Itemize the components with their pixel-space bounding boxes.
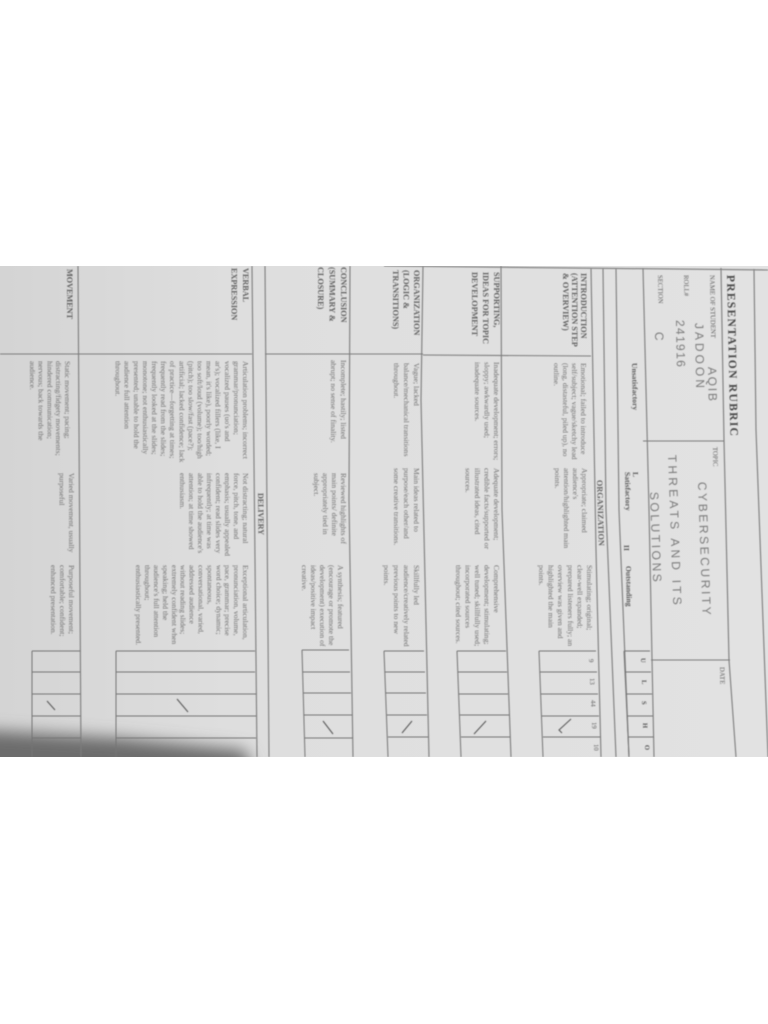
topic field [647,447,718,615]
row: conclusion: Reviewed highlights of [339,473,348,544]
row: organization: previous points to new [392,565,401,634]
row: conclusion: (encourage or promote the [327,565,336,646]
row: conclusion: ideas/positive impact [309,565,318,630]
row: introduction: (ATTENTION STEP [570,273,579,347]
rating letters: U [639,658,646,663]
row: verbal expression: conversational, varied, [196,565,206,634]
row: organization: Skillfully led [412,565,421,605]
rating letters: H [641,723,648,729]
rating scale header: Unsatisfactory [630,363,640,410]
row: verbal expression: pronunciation, volume, [232,565,241,636]
row: verbal expression: audience's full attention [152,565,161,637]
row: verbal expression: infrequently; at time was [205,473,214,549]
row: verbal expression: confident; read slides very [214,473,223,554]
row: conclusion: main points/ definite [330,473,339,536]
section heading: organization: ORGANIZATION [595,480,606,546]
student info fields: 241916 [673,320,688,367]
row: introduction: highlighted the main [547,565,556,628]
row: verbal expression: Articulation problems; incorrect [241,361,250,460]
class score counts: 10 [592,744,599,751]
row: conclusion: CONCLUSION [339,267,348,323]
row: supporting ideas: Inadequate development; errors; [492,362,501,460]
rating scale header: L [631,472,640,477]
row: verbal expression: without reading slides; [179,565,188,634]
row: conclusion: abrupt; no sense of finality. [329,360,338,443]
rating scale header [623,362,639,607]
student info fields: AQIB [705,367,720,401]
row: movement: Purposeful movement; [67,565,76,634]
row: verbal expression: enthusiastically presented. [134,565,143,645]
row: verbal expression: word choice; dynamic; [214,565,223,635]
row: verbal expression: VERBAL [241,268,250,303]
class score counts: 44 [589,700,596,707]
row: introduction: self/subject; vague/sketchy lead [570,363,579,460]
row: verbal expression: grammar/pronunciation; [232,361,241,435]
class score counts: 9 [587,659,594,663]
row: movement: enhanced presentation. [49,565,58,635]
row: introduction: points. [537,565,546,586]
row: verbal expression: artificial; lacked confidence; lack [177,361,186,463]
row: verbal expression: extremely confident when [170,565,179,644]
row: introduction: & OVERVIEW) [561,273,570,331]
row: supporting ideas: SUPPORTING, [492,272,501,327]
row: organization: throughout. [392,363,401,398]
topic field: CYBERSECURITY [695,482,714,615]
row: verbal expression: pace, grammar; precise [223,565,232,636]
rating scale header: II [622,545,631,551]
row: movement: Varied movement, usually [67,473,76,553]
row: conclusion [300,267,348,647]
row: movement: nervous; back towards the [37,361,46,441]
row: verbal expression: frequently read from the slides; [159,361,168,456]
student info fields: JADOON [692,323,707,388]
rating scale header: Outstanding [624,566,634,607]
score grids [32,650,654,757]
row: organization: (LOGIC & [402,270,410,309]
student info fields [652,275,720,401]
topic field: SOLUTIONS [647,492,664,582]
row: supporting ideas: throughout; cited sources. [454,565,463,644]
row: supporting ideas: Adequate development; [492,468,501,540]
row: verbal expression: EXPRESSION [230,268,238,320]
row: introduction: audience's [571,468,580,499]
row: verbal expression: able to hold the audience's [196,473,205,553]
row: verbal expression: presented; unable to hold the [132,361,141,449]
row: introduction: Appropriate; claimed [580,468,589,533]
row: supporting ideas: incorporated sources [464,565,472,628]
row: verbal expression: throughout. [114,361,123,396]
row: supporting ideas: well tuned; skillfully used; [473,565,482,646]
row: supporting ideas: Comprehensive [492,565,501,613]
rubric form [0,266,768,757]
student info fields: C [652,332,666,341]
row: supporting ideas: inadequate sources. [473,362,482,422]
row: supporting ideas: sources. [464,468,472,493]
row: verbal expression: emphasis; usually appealed [223,473,232,556]
row: organization [382,270,421,647]
row: movement: hindered communication; [45,361,54,439]
row: verbal expression: force, pitch, tone, and [232,473,241,539]
row: movement: distracting/fidgety movements; [54,361,63,456]
rating letters: S [640,701,647,705]
title: PRESENTATION RUBRIC [724,275,739,436]
class score counts: 13 [588,678,595,685]
row: conclusion: A synthesis; featured [336,565,345,629]
row: organization: audience/creatively related [402,565,411,647]
row: organization: ORGANIZATION [412,270,421,335]
row: verbal expression: spontaneous, [205,565,214,605]
rating letters [639,658,650,750]
row: verbal expression: Exceptional articulation, [241,565,250,640]
row: verbal expression: throughout; [143,565,152,600]
row: conclusion: CLOSURE) [316,267,325,310]
row: supporting ideas: illustrated ideas, cited [473,468,482,535]
row: introduction: prepared listeners fully; an [566,565,575,646]
row: verbal expression: frequently looked at the slides; [150,361,159,455]
row: verbal expression: mean, it's like), poorly worded; [205,361,214,456]
row: conclusion: appropriately tied in [321,473,330,535]
row: verbal expression: speaking; held the [161,565,170,621]
row: introduction: clear-well expanded; [575,565,584,628]
class score counts: 19 [590,722,597,729]
row: verbal expression: addressed audience [188,565,197,624]
rating letters: L [640,680,647,685]
row: movement: MOVEMENT [65,269,74,320]
rating scale header: Satisfactory [623,472,633,511]
row: introduction: points. [553,468,562,489]
row: verbal expression: audience full attention [123,361,132,429]
row: introduction [537,273,594,646]
row: conclusion: creative. [300,565,309,591]
row: supporting ideas: IDEAS FOR TOPIC [481,272,490,344]
row: introduction: attention/highlighted main [562,468,571,549]
row: verbal expression: too soft/loud (volume); too/high [196,361,204,459]
row: conclusion: Incomplete; hastily; listed [339,360,348,439]
row: verbal expression: ar's); vocalized fillers (like, I [214,361,223,449]
row: movement: audience. [28,361,37,390]
topic field: TOPIC [711,447,718,467]
row: movement: comfortable; confident; [58,565,67,636]
row: conclusion: (SUMMARY & [328,267,336,322]
row: verbal expression: monotone; not enthusiastically [141,361,150,454]
row: introduction: Stimulating; original; [585,565,594,630]
class score counts [588,658,599,752]
row: introduction: overview was given and [556,565,565,639]
section heading: delivery: DELIVERY [256,493,265,535]
row: conclusion: development) execution of [318,565,327,647]
row: introduction: (long, distasteful, piled up), no [561,363,570,457]
row: introduction: INTRODUCTION [579,273,588,339]
paper photo background [0,266,768,757]
row: verbal expression [114,268,250,645]
row: movement [28,269,76,636]
row: supporting ideas: development; stimulating; [482,565,492,645]
student info fields: NAME OF STUDENT [708,275,716,339]
row: verbal expression: enthusiasm. [178,473,187,509]
row: organization: points. [382,565,391,586]
row: supporting ideas [454,272,501,646]
row: verbal expression: Not distracting; natural [241,473,250,543]
row: introduction: Emotional; failed to introduce [579,363,588,455]
row: supporting ideas: sloppy; awkwardly used; [482,362,492,438]
row: supporting ideas: credible facts/supported or [482,468,492,549]
student info fields: ROLL# [682,275,689,297]
row: conclusion: subject. [312,473,321,497]
student info fields: SECTION [656,275,664,304]
shadow at lower left corner [0,720,260,757]
row: organization: balance/mechanical transitions [402,363,411,456]
row: movement: purposeful [58,473,66,505]
row: organization: some creative transitions. [392,468,401,545]
rating letters: O [643,745,650,750]
topic field: THREATS AND ITS [665,455,684,605]
row: verbal expression: attention; at time showed [187,473,196,550]
row: verbal expression: vocalized pauses (uo's and [223,361,232,442]
row: organization: TRANSITIONS) [391,270,400,329]
date field: DATE [718,667,725,684]
check marks [47,699,571,734]
row: introduction: outline. [552,363,561,386]
row: organization: Vague; lacked [412,363,421,406]
row: movement: Static movement; pacing; [63,361,72,439]
row: organization: purpose/each other/and [402,468,411,539]
row: organization: Main ideas related to [412,468,421,532]
row: verbal expression: (pitch); too slow/fast (pace?); [186,361,195,451]
row: supporting ideas: DEVELOPMENT [470,272,479,337]
row: verbal expression: of practice—forgetting at times; [168,361,177,458]
